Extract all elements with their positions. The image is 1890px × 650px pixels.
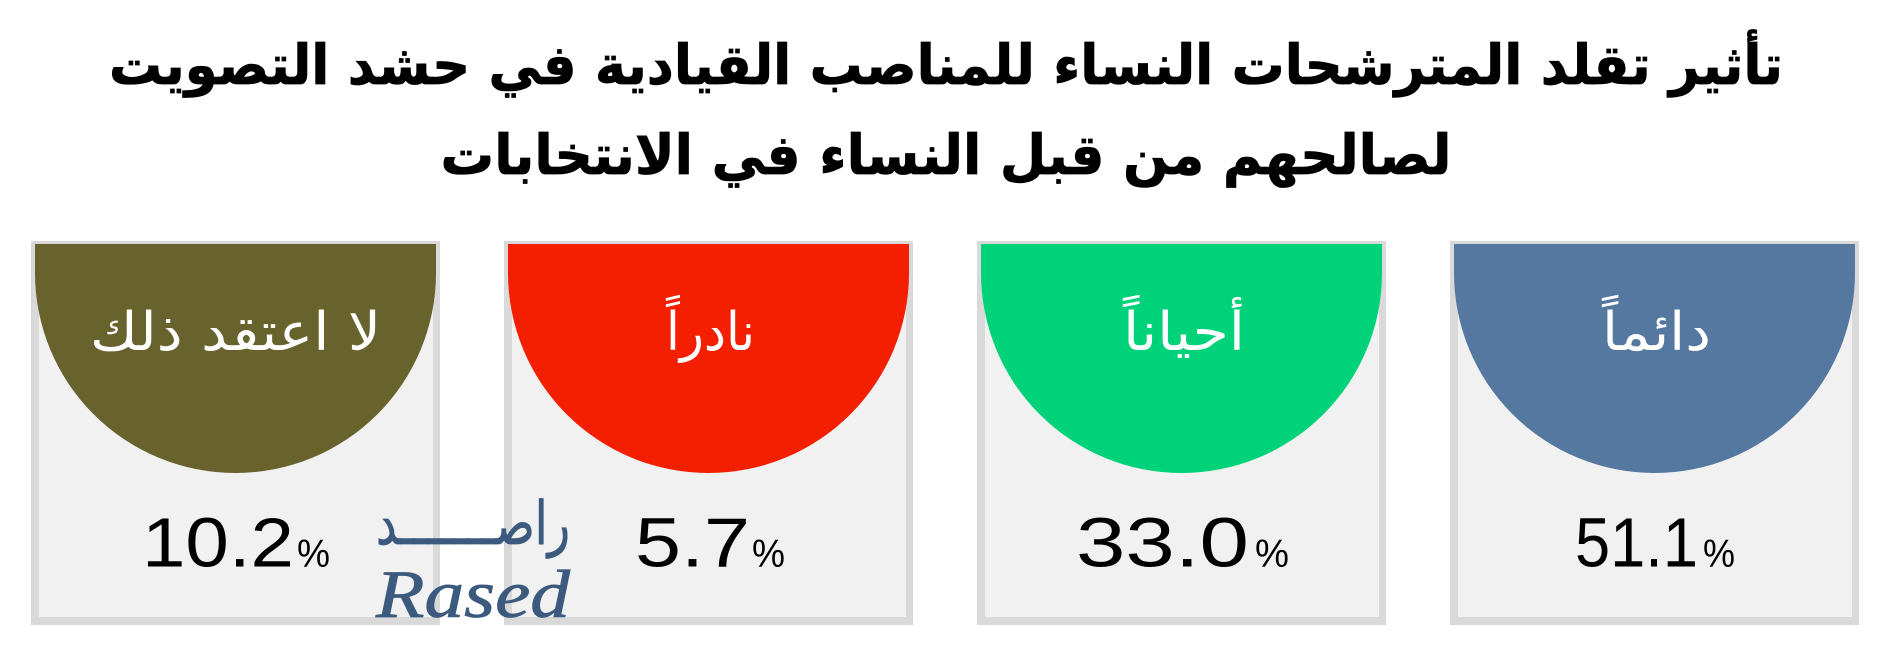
shape: blue semicircle: [1454, 244, 1855, 473]
shape: red semicircle: [508, 244, 909, 473]
value: 51.1%: %: [1703, 533, 1735, 576]
value: 10.2%: %: [297, 533, 330, 576]
title: لصالحهم من قبل النساء في الانتخابات: [440, 123, 1452, 188]
value: 33.0%: 33.0: [1076, 504, 1249, 582]
logo: Rased: [375, 489, 571, 632]
shape: green semicircle: [981, 244, 1382, 473]
value: 51.1%: 51.1: [1575, 504, 1698, 582]
logo: Rased: Rased: [375, 556, 571, 632]
panel: دائماً: [1450, 241, 1859, 625]
label: لا اعتقد ذلك: لا اعتقد ذلك: [90, 302, 381, 363]
value: 33.0%: [1076, 504, 1289, 582]
panel: نادراً: [504, 241, 913, 625]
label: أحياناً: أحياناً: [1122, 294, 1245, 363]
panel: أحياناً: [977, 241, 1386, 625]
value: 5.7%: %: [752, 533, 785, 576]
value: 10.2%: 10.2: [142, 504, 294, 582]
panel: لا اعتقد ذلك: [31, 241, 440, 625]
logo: Rased: راصـــــــد: [376, 489, 570, 559]
title: تأثير تقلد المترشحات النساء للمناصب القيادية في حشد التصويت: [109, 29, 1783, 98]
label: دائماً: دائماً: [1601, 294, 1711, 363]
value: 5.7%: 5.7: [635, 504, 750, 582]
value: 33.0%: %: [1255, 533, 1289, 576]
shape: olive semicircle: [35, 244, 436, 473]
value: 5.7%: [635, 504, 785, 582]
label: نادراً: نادراً: [665, 294, 755, 363]
title: [109, 29, 1783, 188]
